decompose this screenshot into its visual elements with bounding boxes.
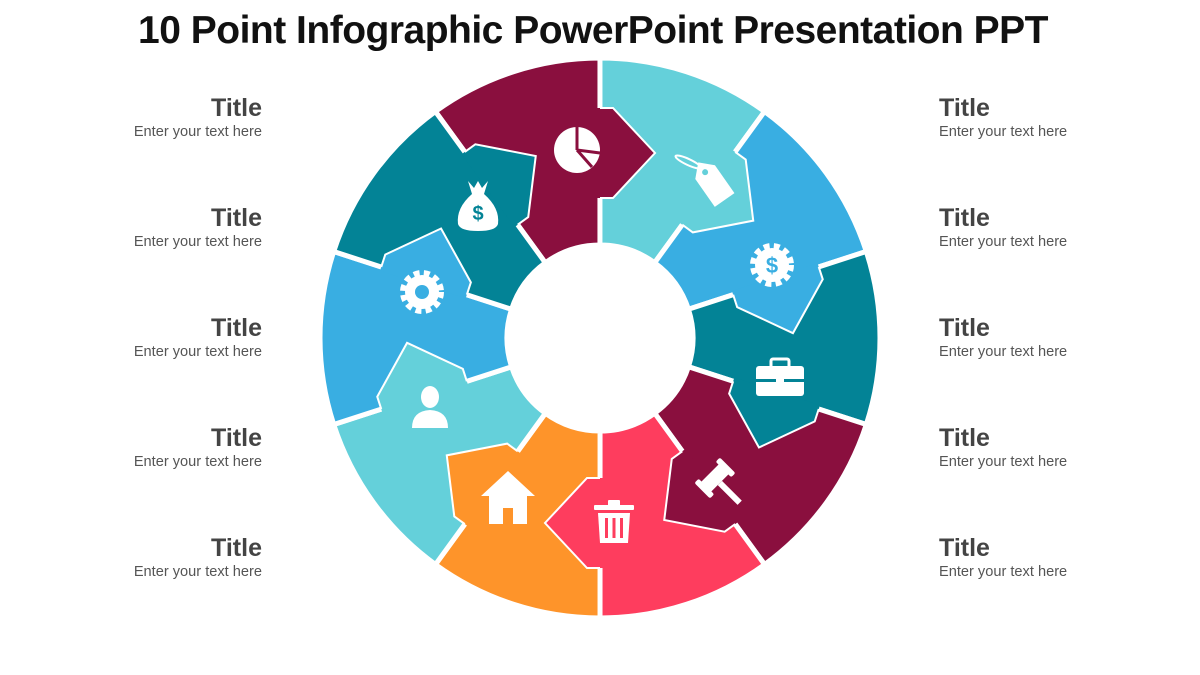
label left 3: Title [211, 314, 262, 342]
icon: gavel [694, 457, 752, 515]
label left 5: Enter your text here [134, 564, 262, 580]
icon: gear dollar: $ [766, 253, 778, 278]
label right 4: Enter your text here [939, 454, 1067, 470]
label left 3: Enter your text here [134, 344, 262, 360]
icon: person [412, 386, 448, 428]
label right 5: Title [939, 534, 990, 562]
icon: house [481, 471, 535, 524]
icon: tag [673, 139, 734, 210]
label left 4: Title [211, 424, 262, 452]
label left 1 [134, 94, 262, 140]
label right 5: Enter your text here [939, 564, 1067, 580]
icon: pie chart [554, 127, 600, 173]
icon: gear dollar [754, 247, 790, 283]
label right 2: Enter your text here [939, 234, 1067, 250]
label right 3: Title [939, 314, 990, 342]
label right 1: Enter your text here [939, 124, 1067, 140]
label right 3: Enter your text here [939, 344, 1067, 360]
title: 10 Point Infographic PowerPoint Presentation PPT [138, 9, 1048, 52]
label left 1: Title [211, 94, 262, 122]
label right 2 [939, 204, 1067, 250]
label left 2: Enter your text here [134, 234, 262, 250]
label left 1: Enter your text here [134, 124, 262, 140]
icon: trash [594, 500, 634, 543]
label right 4: Title [939, 424, 990, 452]
icon: briefcase [756, 359, 804, 396]
label right 4 [939, 424, 1067, 470]
icon: money bag [458, 181, 498, 231]
label left 5 [134, 534, 262, 580]
icon: gear [404, 274, 440, 310]
label left 2: Title [211, 204, 262, 232]
label right 5 [939, 534, 1067, 580]
label left 5: Title [211, 534, 262, 562]
label right 1 [939, 94, 1067, 140]
label left 2 [134, 204, 262, 250]
label left 4 [134, 424, 262, 470]
label left 4: Enter your text here [134, 454, 262, 470]
label left 3 [134, 314, 262, 360]
label right 1: Title [939, 94, 990, 122]
icon: money bag: $ [472, 203, 484, 225]
label right 3 [939, 314, 1067, 360]
label right 2: Title [939, 204, 990, 232]
